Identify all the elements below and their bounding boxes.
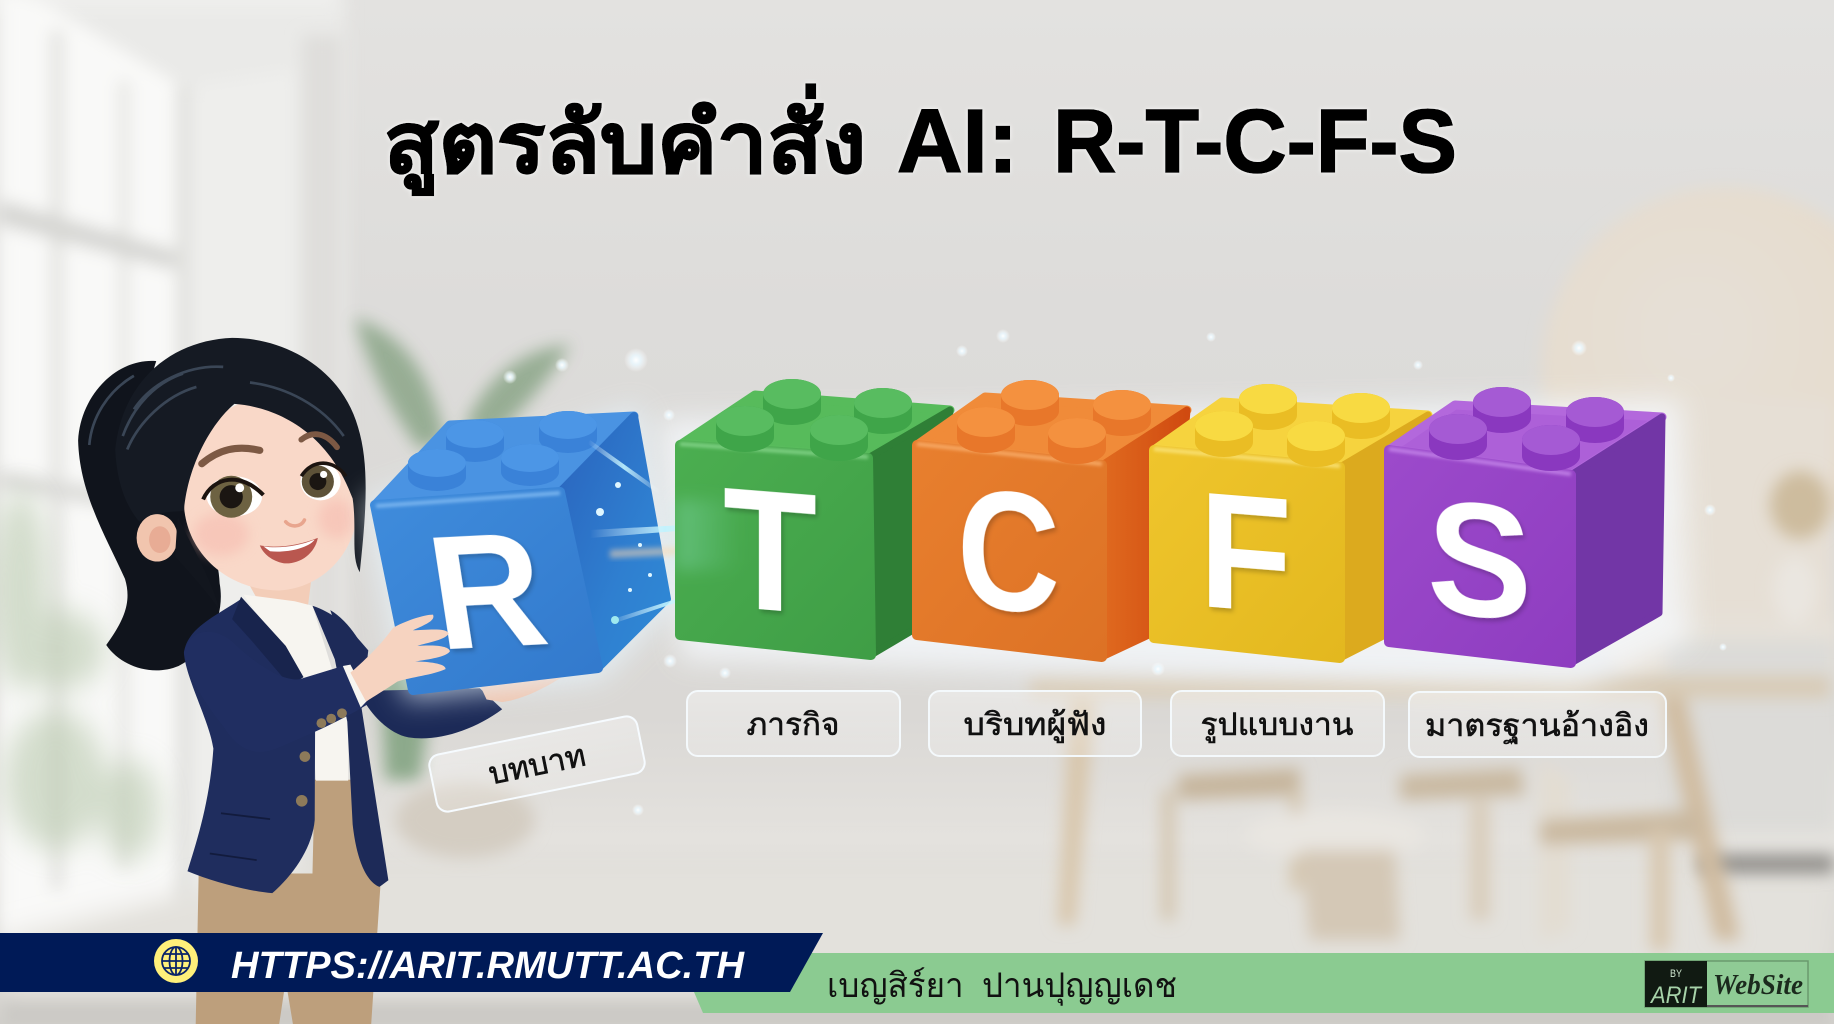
label: บทบาท: บทบาท — [486, 738, 589, 791]
pin — [258, 674, 276, 691]
label: บริบทผู้ฟัง — [929, 691, 1141, 756]
letter C: C — [957, 453, 1060, 651]
trousers and legs — [196, 780, 380, 1024]
hand and fingers — [350, 615, 450, 702]
top face — [1389, 405, 1662, 475]
studs — [408, 411, 597, 491]
edge highlight — [1154, 449, 1340, 466]
back arm sleeve — [330, 610, 502, 738]
pocket lines — [210, 813, 270, 860]
ponytail — [78, 361, 221, 670]
hair cap — [115, 338, 366, 572]
top face — [375, 416, 634, 505]
studs — [1195, 384, 1390, 467]
character: woman (hair, body, back arm) — [78, 338, 563, 1024]
label: รูปแบบงาน — [1171, 691, 1384, 756]
top face — [917, 397, 1187, 465]
face — [184, 398, 357, 591]
jacket torso — [184, 599, 315, 893]
letter R: R — [417, 497, 557, 684]
studs — [957, 380, 1151, 464]
front face — [375, 492, 598, 690]
energy beams — [588, 440, 740, 624]
right face — [1102, 410, 1187, 657]
back hand — [480, 675, 563, 702]
ear — [137, 514, 178, 562]
sleeve buttons — [316, 708, 347, 728]
label: มาตรฐานอ้างอิง — [1409, 692, 1666, 757]
edge highlight — [376, 493, 560, 506]
footer: green author bar — [694, 953, 1834, 1013]
background: peach disc — [1542, 187, 1834, 680]
edge highlight — [1389, 449, 1571, 474]
label: มาตรฐานอ้างอิง: มาตรฐานอ้างอิง — [1425, 708, 1649, 744]
jacket right panel — [312, 606, 388, 887]
block F: yellow — [1154, 384, 1428, 658]
front face — [1389, 450, 1571, 663]
lapel — [232, 597, 304, 686]
url text: HTTPS://ARIT.RMUTT.AC.TH — [231, 945, 746, 987]
block C: orange — [917, 380, 1187, 657]
label: รูปแบบงาน: รูปแบบงาน — [1200, 707, 1354, 743]
footer: navy URL bar — [0, 933, 823, 992]
studs — [1429, 387, 1624, 471]
background: floor bottom tone — [0, 1000, 1834, 1024]
block S: purple — [1389, 387, 1662, 663]
label: ภารกิจ — [687, 691, 900, 756]
buttons — [300, 751, 310, 762]
edge highlight — [917, 444, 1102, 464]
logo: By ARIT Website: BY — [1670, 968, 1683, 980]
block T: green — [676, 379, 950, 655]
right face — [1340, 415, 1428, 658]
title — [384, 84, 1457, 196]
front face — [917, 445, 1102, 657]
background: floor — [0, 860, 1834, 1024]
edge highlight — [680, 444, 868, 457]
hair highlights — [89, 367, 344, 449]
cuff — [343, 665, 368, 707]
label: บทบาท — [427, 714, 647, 814]
title: R-T-C-F-S — [1053, 92, 1457, 192]
right face — [560, 416, 667, 668]
background: shelf and vases — [1660, 471, 1834, 873]
sparkles — [503, 329, 1727, 816]
right face — [1571, 417, 1662, 663]
eye right — [300, 463, 341, 500]
letter S: S — [1427, 465, 1532, 656]
background: wooden table and chairs — [1030, 676, 1830, 950]
top face — [680, 395, 950, 458]
top face — [1154, 402, 1428, 467]
front face — [1154, 450, 1340, 658]
logo: By ARIT Website — [1645, 961, 1808, 1009]
brows — [202, 448, 260, 464]
block R: blue — [365, 405, 740, 700]
label: ภารกิจ: ภารกิจ — [746, 707, 840, 742]
hair strand by ear — [175, 516, 220, 610]
sleeve — [184, 632, 367, 752]
studs — [716, 379, 912, 461]
right face — [868, 410, 950, 655]
background: left wall — [0, 0, 345, 930]
background: blurred planter — [395, 782, 535, 858]
eye left — [207, 476, 262, 516]
background: blurred plant — [355, 318, 570, 780]
letter F: F — [1199, 457, 1292, 649]
nose — [286, 520, 304, 526]
shirt — [243, 595, 348, 781]
character: front hand on block — [184, 615, 450, 752]
neck — [241, 570, 312, 610]
logo: By ARIT Website: WebSite — [1713, 969, 1803, 1001]
author name: เบญสิร์ยา ปานปุญญเดช — [827, 967, 1177, 1006]
title: สูตรลับคำสั่ง — [384, 84, 866, 196]
background: garden through window — [0, 490, 160, 860]
front face — [680, 445, 871, 655]
teal energy tint — [676, 500, 740, 570]
letter T: T — [723, 450, 817, 651]
glow behind blocks — [660, 400, 1690, 690]
mouth — [260, 538, 318, 563]
title: AI: — [897, 92, 1018, 192]
logo: By ARIT Website: ARIT — [1649, 982, 1703, 1009]
icon: globe — [154, 939, 198, 983]
label: บริบทผู้ฟัง: บริบทผู้ฟัง — [964, 707, 1106, 743]
